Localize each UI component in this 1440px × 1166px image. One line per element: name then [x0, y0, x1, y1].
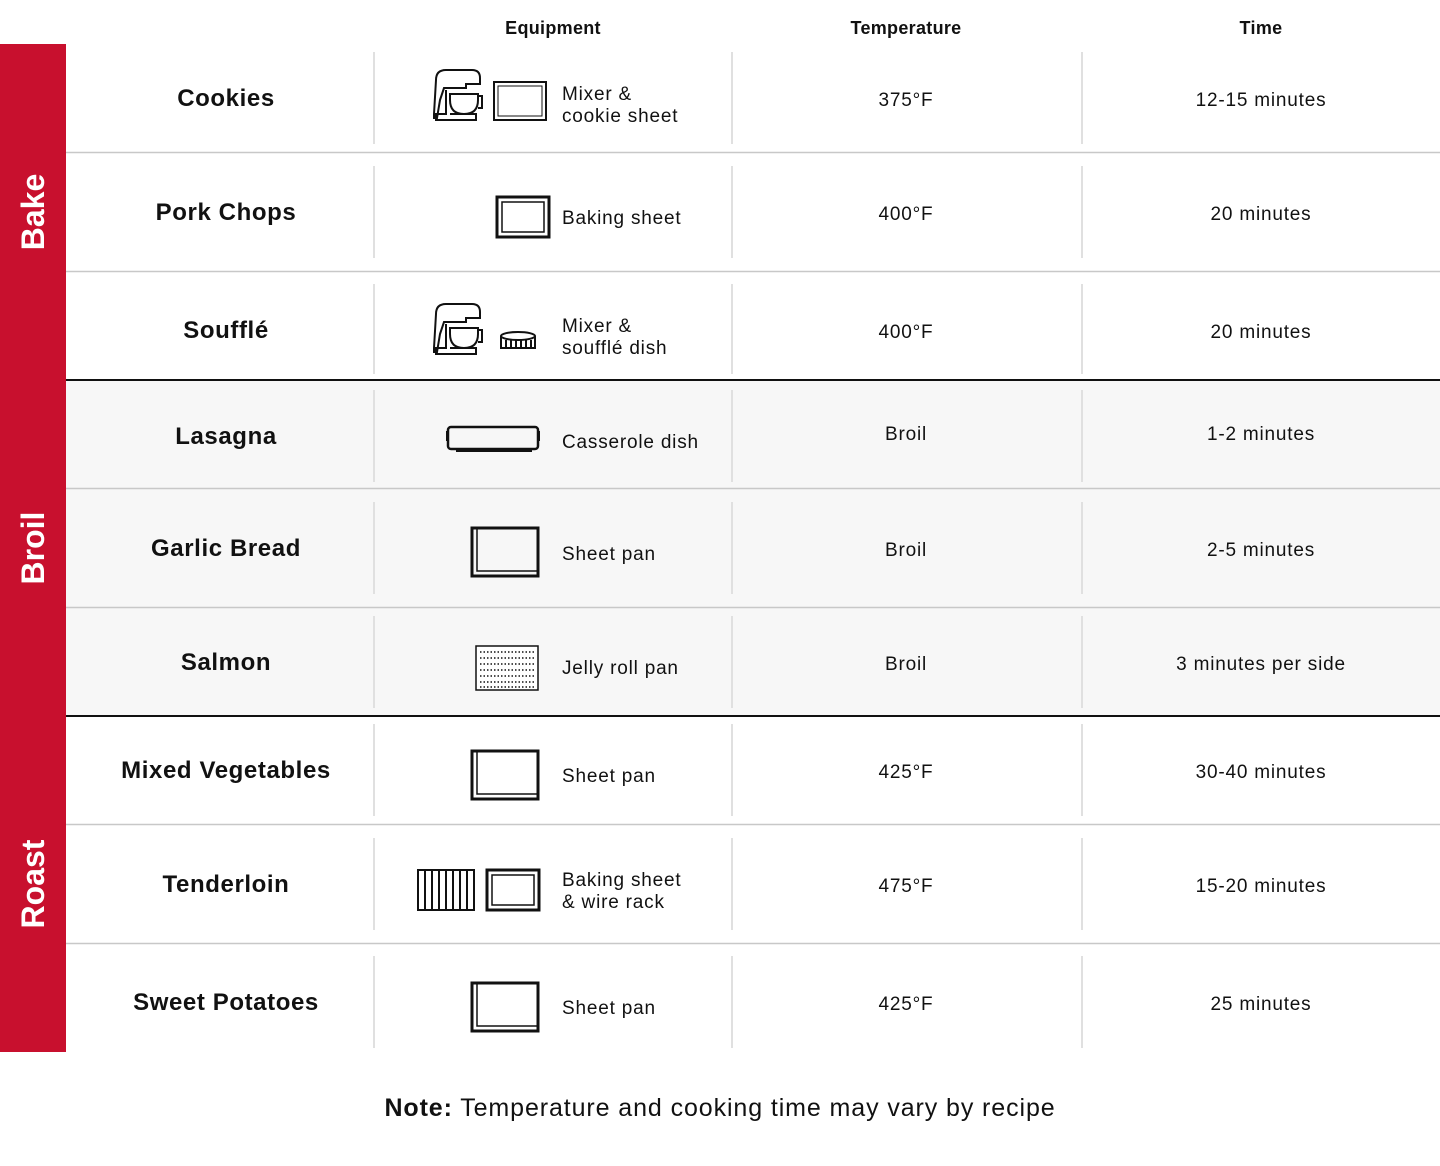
icon: mixer: [434, 304, 482, 354]
icon: sheet pan: [472, 751, 538, 799]
row: Cookies: cookie sheet: [562, 106, 678, 127]
row: Tenderloin: Baking sheet: [562, 870, 681, 891]
row: Lasagna: 1-2 minutes: [1207, 424, 1315, 445]
row: Sweet Potatoes: Sheet pan: [562, 998, 656, 1019]
row: Sweet Potatoes: Sweet Potatoes: [133, 989, 319, 1016]
row: Sweet Potatoes: 425°F: [879, 994, 933, 1015]
icon: baking sheet: [487, 870, 539, 910]
icon: sheet pan: [472, 983, 538, 1031]
row: Salmon: Salmon: [181, 649, 271, 676]
row: Salmon: Broil: [885, 654, 927, 675]
row: Pork Chops: Pork Chops: [156, 199, 296, 226]
row: Soufflé: 400°F: [879, 322, 933, 343]
row: Cookies: Mixer &: [562, 84, 632, 105]
category band: Roast: Roast: [15, 839, 51, 928]
header row: Temperature: [850, 18, 962, 38]
category band: Roast: [0, 716, 66, 1052]
row: Mixed Vegetables: Mixed Vegetables: [121, 757, 331, 784]
header row: Time: [1240, 18, 1282, 38]
row: Sweet Potatoes: [133, 983, 1311, 1031]
row: Garlic Bread: Garlic Bread: [151, 535, 301, 562]
row: Soufflé: soufflé dish: [562, 338, 667, 359]
row grid lines: [66, 152, 1440, 944]
row: Garlic Bread: Sheet pan: [562, 544, 656, 565]
icon: souffle dish: [501, 332, 535, 348]
row: Mixed Vegetables: [121, 751, 1326, 799]
row: Pork Chops: 400°F: [879, 204, 933, 225]
icon: baking sheet: [497, 197, 549, 237]
row: Pork Chops: [156, 197, 1311, 237]
icon: cookie sheet: [494, 82, 546, 120]
row: Tenderloin: 15-20 minutes: [1196, 876, 1326, 897]
row: Tenderloin: [163, 870, 1326, 913]
icon: casserole dish: [446, 427, 540, 451]
icon: wire rack: [418, 870, 474, 910]
row: Tenderloin: 475°F: [879, 876, 933, 897]
row: Cookies: Cookies: [177, 85, 275, 112]
row: Cookies: [177, 70, 1326, 127]
row: Soufflé: [183, 304, 1311, 359]
category band: Bake: Bake: [15, 174, 51, 250]
row: Mixed Vegetables: 425°F: [879, 762, 933, 783]
row: Garlic Bread: 2-5 minutes: [1207, 540, 1315, 561]
row: Garlic Bread: [151, 528, 1315, 576]
row: Lasagna: Casserole dish: [562, 432, 699, 453]
row: Salmon: 3 minutes per side: [1176, 654, 1346, 675]
row: Salmon: [181, 646, 1346, 690]
row: Sweet Potatoes: 25 minutes: [1211, 994, 1311, 1015]
row: Soufflé: Mixer &: [562, 316, 632, 337]
row: Salmon: Jelly roll pan: [562, 658, 679, 679]
row: Tenderloin: & wire rack: [562, 892, 665, 913]
broil background: [66, 380, 1440, 716]
row: Pork Chops: Baking sheet: [562, 208, 681, 229]
row: Tenderloin: Tenderloin: [163, 871, 289, 898]
row: Cookies: 375°F: [879, 90, 933, 111]
row: Lasagna: [175, 423, 1315, 453]
icon: sheet pan: [472, 528, 538, 576]
note: Note: Temperature and cooking time may vary by recipe: [384, 1094, 1056, 1122]
header row: [505, 18, 1282, 38]
category band: Bake: [0, 44, 66, 380]
icon: jelly roll pan: [476, 646, 538, 690]
row: Mixed Vegetables: Sheet pan: [562, 766, 656, 787]
row: Pork Chops: 20 minutes: [1211, 204, 1311, 225]
header row: Equipment: [505, 18, 601, 38]
row: Mixed Vegetables: 30-40 minutes: [1196, 762, 1326, 783]
category band: Broil: Broil: [15, 512, 51, 584]
row: Garlic Bread: Broil: [885, 540, 927, 561]
row: Lasagna: Lasagna: [175, 423, 277, 450]
row: Soufflé: Soufflé: [183, 317, 269, 344]
icon: mixer: [434, 70, 482, 120]
row: Lasagna: Broil: [885, 424, 927, 445]
row: Cookies: 12-15 minutes: [1196, 90, 1326, 111]
row: Soufflé: 20 minutes: [1211, 322, 1311, 343]
category band: Broil: [0, 380, 66, 716]
